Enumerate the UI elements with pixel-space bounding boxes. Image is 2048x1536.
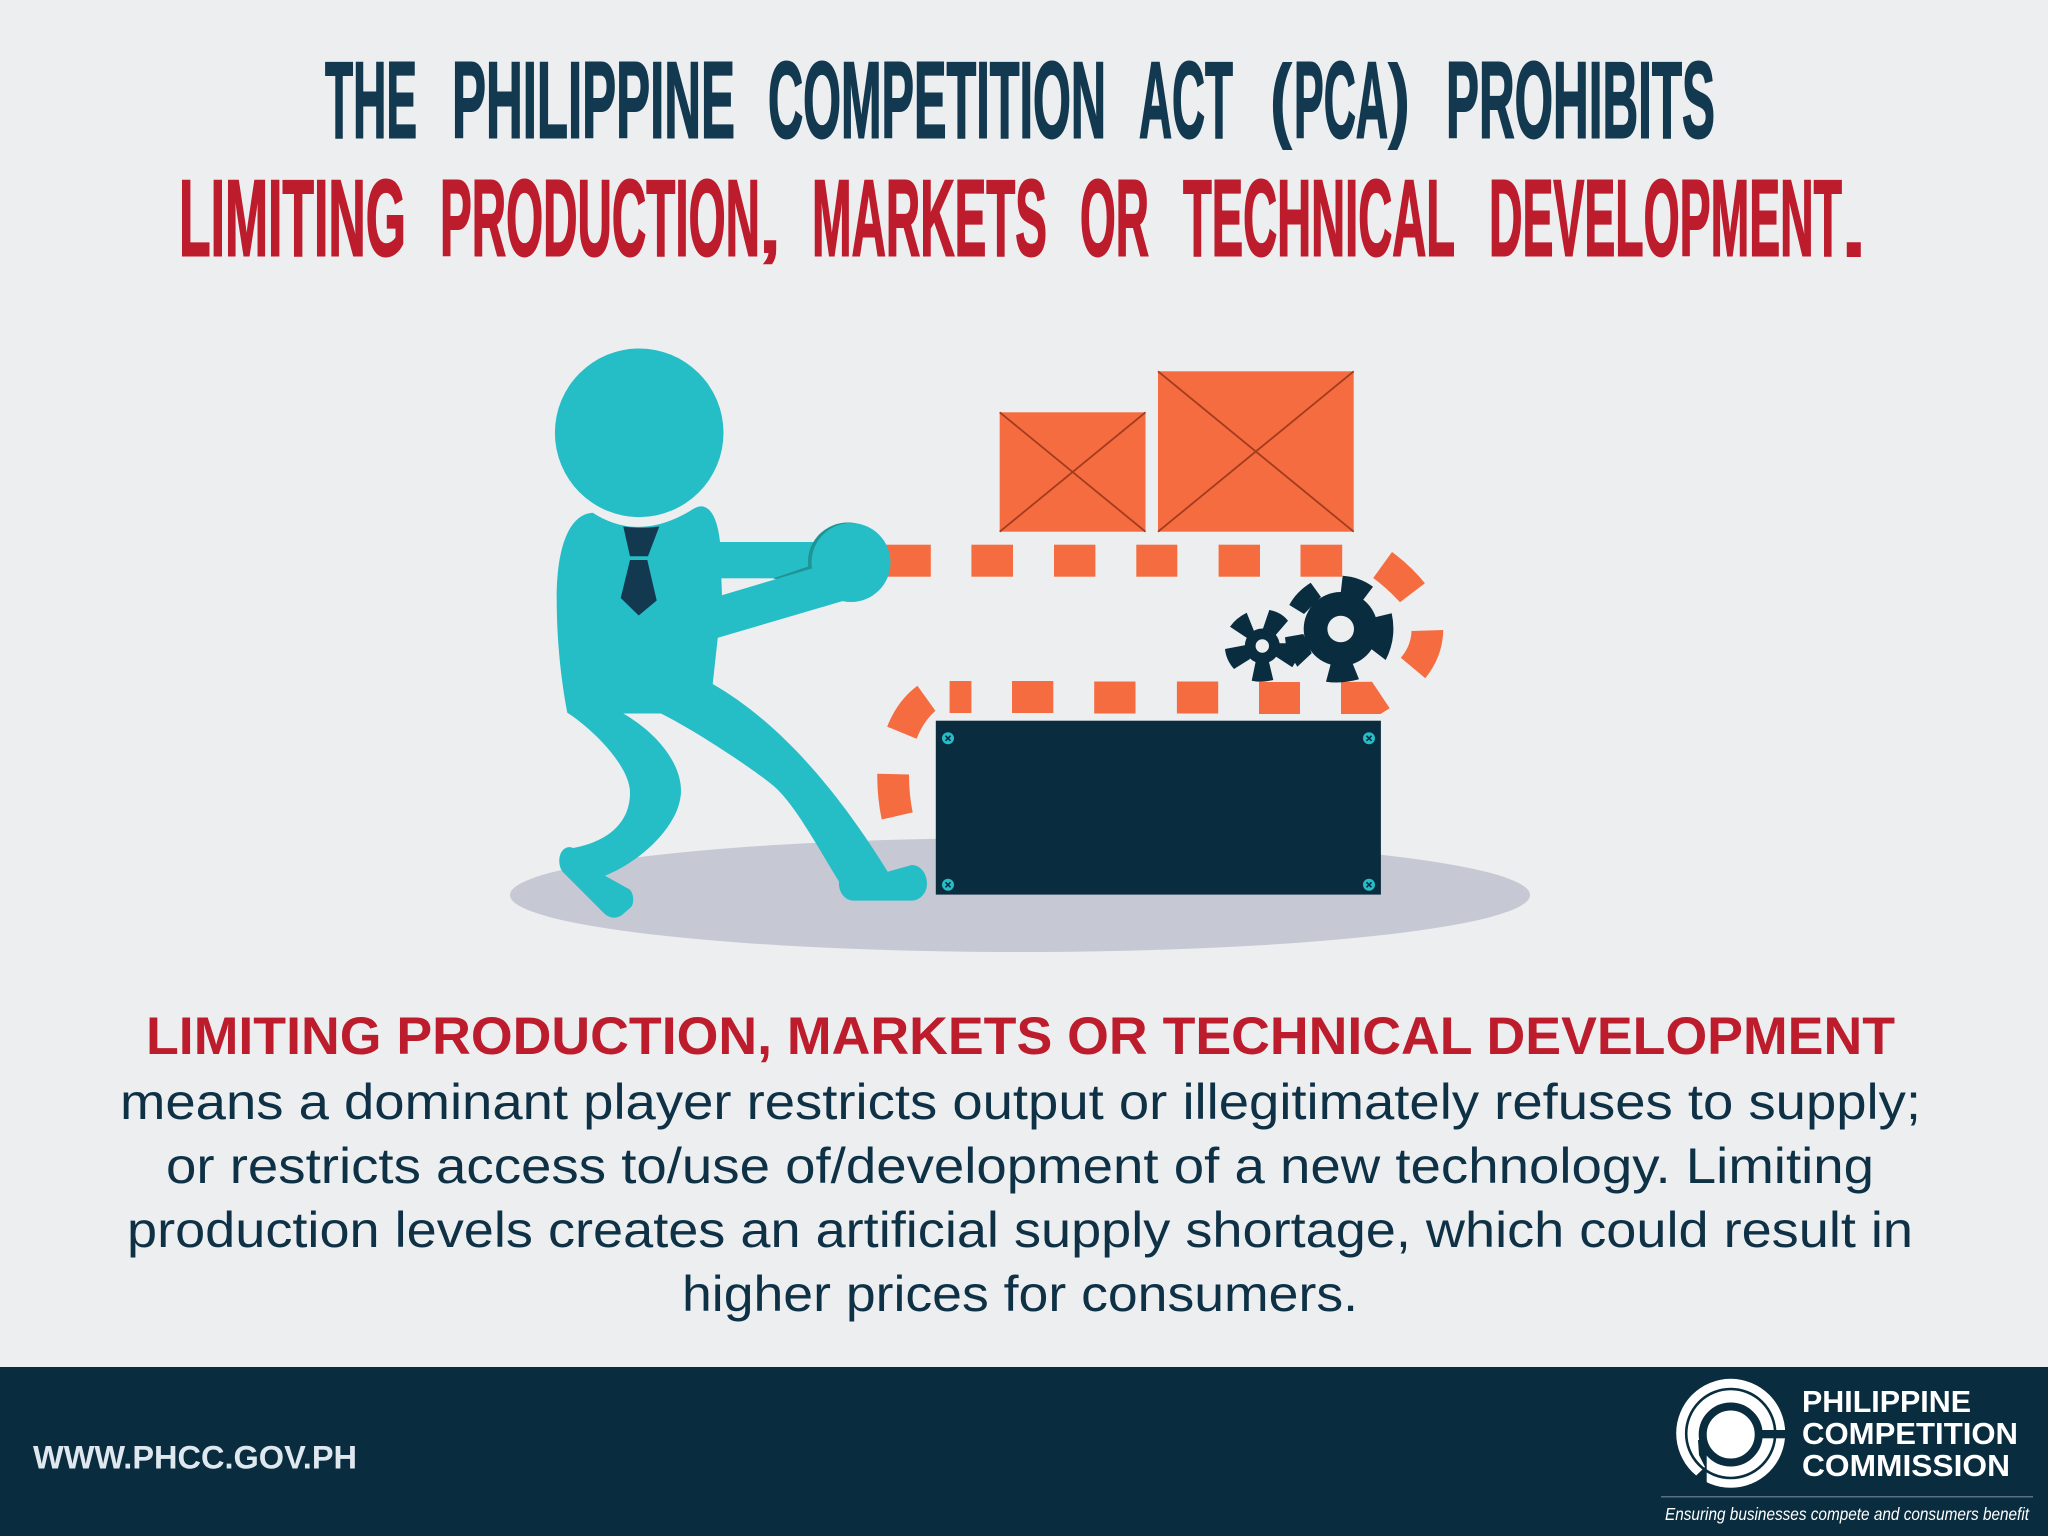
figure: businessman pulling bbox=[555, 348, 927, 918]
title: line one: COMPETITION bbox=[768, 40, 1106, 162]
footer website: WWW.PHCC.GOV.PH bbox=[33, 1440, 357, 1476]
footer band bbox=[0, 1367, 2048, 1536]
dashed conveyor path bbox=[877, 545, 1443, 820]
title: line one: PCA bbox=[1294, 40, 1388, 162]
title: line one: THE bbox=[325, 40, 417, 162]
title: line one bbox=[325, 40, 1715, 162]
logo wordmark: COMPETITION bbox=[1802, 1417, 2018, 1451]
logo mark bbox=[1676, 1379, 1791, 1490]
title: line two bbox=[179, 158, 1866, 280]
explanation heading: LIMITING PRODUCTION, MARKETS OR TECHNICAL DEVELOPMENT bbox=[146, 1007, 1895, 1066]
title: line two: PRODUCTION bbox=[440, 158, 760, 280]
icon: large crate bbox=[1158, 371, 1354, 532]
title: line two: , bbox=[760, 188, 780, 268]
title: line two: . bbox=[1842, 180, 1866, 275]
icon: necktie bbox=[621, 526, 659, 616]
title: line one: ACT bbox=[1139, 40, 1233, 162]
title: line two: TECHNICAL bbox=[1183, 158, 1455, 280]
logo rule bbox=[1661, 1496, 2033, 1498]
machine block with screws bbox=[936, 721, 1381, 895]
explanation body text: production levels creates an artificial supply shortage, which could result in bbox=[127, 1202, 1913, 1258]
text: PROHIBITS bbox=[1446, 40, 1715, 162]
icon: small crate bbox=[1000, 412, 1146, 532]
logo wordmark: PHILIPPINE bbox=[1802, 1385, 1971, 1419]
title: line two: MARKETS bbox=[812, 158, 1047, 280]
explanation body text: means a dominant player restricts output or illegitimately refuses to supply; bbox=[120, 1074, 1921, 1130]
title: line two: LIMITING bbox=[179, 158, 406, 280]
title: line one: ) bbox=[1388, 46, 1410, 150]
title: line one: PHILIPPINE bbox=[452, 40, 735, 162]
explanation body text: higher prices for consumers. bbox=[682, 1266, 1358, 1322]
title: line one: ( bbox=[1270, 46, 1292, 150]
logo wordmark bbox=[1802, 1385, 2018, 1483]
explanation body text: or restricts access to/use of/development of a new technology. Limiting bbox=[166, 1138, 1874, 1194]
icon: gears bbox=[1225, 576, 1393, 682]
title: line two: OR bbox=[1080, 158, 1149, 280]
ground shadow bbox=[510, 838, 1530, 952]
explanation body text bbox=[120, 1074, 1921, 1322]
logo wordmark: COMMISSION bbox=[1802, 1449, 2010, 1483]
